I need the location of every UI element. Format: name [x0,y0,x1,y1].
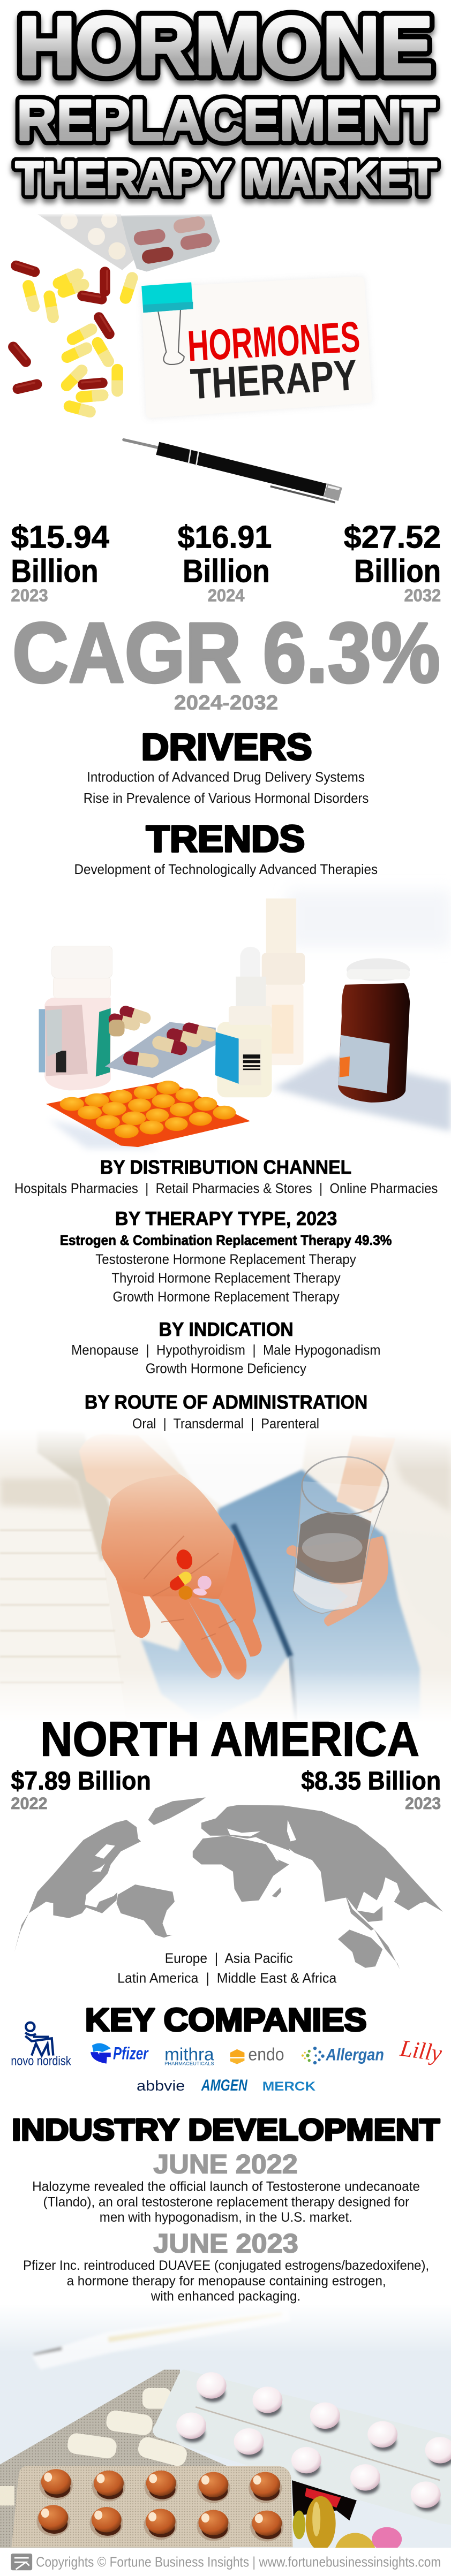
development: June 2023: Pfizer Inc. reintroduced DUAVEE (conjugated estrogens/bazedoxifene), [23,2258,429,2273]
title line: HORMONE: HORMONE [18,0,433,92]
logo: Merck: MERCK [262,2080,315,2094]
stat: 2032 value: Billion [354,553,441,589]
stat: North America 2022 [11,1766,151,1813]
image background and shadows [49,890,451,1149]
section: by therapy type: Thyroid Hormone Replacement Therapy [111,1271,341,1286]
image: hand holding pills and glass of water [0,1428,451,1723]
image: brown jar [338,958,410,1103]
photo: white pill blister [153,2369,451,2525]
image: front dropper bottle [215,947,272,1097]
text: trends list: Development of Technologically Advanced Therapies [74,862,378,877]
image: scattered yellow and red capsules [6,259,139,419]
text: drivers list [84,770,369,806]
photo background: sofa and clothing [0,1428,451,1723]
heading: key companies: KEY COMPANIES [85,2002,367,2038]
image: orange tablet blister [46,1081,250,1147]
photo: right arm and hand [287,1435,395,1627]
text: other regions [117,1950,337,1986]
logo: Allergan [302,2046,384,2064]
panel: title and hero image [6,0,437,503]
image: blister packs [37,212,220,271]
stat: 2032 value [344,520,441,605]
section: by therapy type [60,1207,392,1304]
section: by distribution channel: BY DISTRIBUTION CHANNEL [100,1156,351,1178]
stat: 2024 value: $16.91 [177,520,272,555]
section: by indication: Menopause | Hypothyroidism | Male Hypogonadism [71,1343,380,1358]
icon: binder clip [141,282,193,364]
heading: industry development: INDUSTRY DEVELOPMENT [12,2113,440,2147]
stat: 2024 value: 2024 [208,585,245,605]
photo: blurred thermometer [33,2313,280,2369]
stat: 2023 value: $15.94 [11,520,109,555]
title line: REPLACEMENT: REPLACEMENT [17,88,435,152]
heading: drivers: DRIVERS [141,726,312,768]
section: by route of administration: Oral | Transdermal | Parenteral [132,1416,319,1431]
icon: Fortune Business Insights logo [11,2554,32,2570]
development: June 2023: JUNE 2023 [153,2228,298,2258]
stat: North America 2023 [301,1766,441,1813]
logo: Allergan: Allergan [326,2046,384,2064]
development: June 2022: JUNE 2022 [153,2149,298,2179]
photo: loose pills [292,2480,402,2548]
panel: industry development and closing image [0,2149,451,2574]
text: other regions: Latin America | Middle East & Africa [117,1970,337,1986]
development: June 2022: (Tlando), an oral testosterone replacement therapy designed for [43,2194,409,2209]
panel: medicine bottles image [14,890,451,1377]
CAGR period: 2024-2032 [174,691,278,713]
title line: THERAPY MARKET: THERAPY MARKET [16,152,437,204]
image: note card with binder clip [141,277,372,418]
text: drivers list: Introduction of Advanced Drug Delivery Systems [87,770,365,785]
photo: silver capsule blister [0,2369,230,2548]
stat: North America 2023: 2023 [405,1794,441,1813]
development: June 2022: men with hypogonadism, in the U.S. market. [100,2210,352,2225]
section: by therapy type: Estrogen & Combination Replacement Therapy 49.3% [60,1233,392,1248]
heading: north america: NORTH AMERICA [40,1712,419,1766]
development: June 2023: with enhanced packaging. [151,2289,300,2304]
stat: 2032 value: $27.52 [344,520,441,555]
title line: THERAPY MARKET: THERAPY MARKET [16,152,437,204]
development: June 2022: Halozyme revealed the official launch of Testosterone undecanoate [32,2179,420,2194]
text: drivers list: Rise in Prevalence of Various Hormonal Disorders [84,791,369,806]
section: by therapy type: Growth Hormone Replacement Therapy [113,1289,340,1304]
card text: THERAPY: THERAPY [189,351,358,408]
image: capsule blister [105,1004,219,1078]
development: June 2023: a hormone therapy for menopause containing estrogen, [67,2274,386,2289]
section: by therapy type: BY THERAPY TYPE, 2023 [115,1207,337,1229]
photo: pills on palm [168,1548,212,1600]
image: tall dropper bottle [262,899,305,1065]
photo: fingers [108,1536,262,1680]
stat: 2024 value: Billion [183,553,270,589]
stat: North America 2022: 2022 [11,1794,48,1813]
image: blister packs and thermometer [0,2313,451,2548]
section: by therapy type: Testosterone Hormone Replacement Therapy [95,1252,356,1267]
image: pen [124,440,340,503]
panel: world map, regions, companies [11,1797,444,2147]
text: other regions: Europe | Asia Pacific [165,1950,293,1966]
photo: forearm and open palm [79,1434,262,1680]
card text: HORMONES: HORMONES [186,313,361,370]
logo: novo nordisk: novo nordisk [11,2054,71,2068]
heading: trends: TRENDS [146,818,305,860]
image: white bottle [39,946,112,1090]
section: by indication: Growth Hormone Deficiency [146,1362,306,1377]
title [16,0,437,204]
photo: glass of water [294,1457,388,1614]
logo: endo [230,2045,284,2065]
stat: 2023 value [11,520,109,605]
logo: abbvie: abbvie [137,2078,185,2094]
stat: North America 2023: $8.35 Billion [301,1766,441,1795]
logo: Amgen: AMGEN [201,2077,248,2094]
logo: mithra: PHARMACEUTICALS [164,2061,214,2066]
logo: novo nordisk [11,2023,71,2068]
section: by indication: BY INDICATION [159,1318,294,1340]
development: June 2023 [23,2228,429,2304]
section: by route of administration [85,1391,367,1431]
panel: route of administration, hand image and region [0,1391,451,1813]
stat: 2032 value: 2032 [404,585,441,605]
logo: Lilly: Lilly [398,2035,444,2066]
development: June 2022 [32,2149,420,2225]
logo: Pfizer [91,2043,149,2064]
title line: REPLACEMENT: REPLACEMENT [17,88,435,152]
stat: 2023 value: 2023 [11,585,48,605]
section: by indication [71,1318,380,1377]
footer [11,2554,441,2570]
section: by route of administration: BY ROUTE OF ADMINISTRATION [85,1391,367,1413]
photo: orange tablet blister [11,2466,293,2547]
panel: market size and CAGR [11,520,441,877]
map: world globe [14,1797,443,1969]
stat: North America 2022: $7.89 Billion [11,1766,151,1795]
stat: 2024 value [177,520,272,605]
logo: Pfizer: Pfizer [113,2044,149,2063]
logo: endo: endo [248,2045,284,2065]
logo: mithra: mithra [164,2045,214,2065]
stat: 2023 value: Billion [11,553,99,589]
title line: HORMONE: HORMONE [18,0,433,92]
section: by distribution channel [14,1156,438,1196]
